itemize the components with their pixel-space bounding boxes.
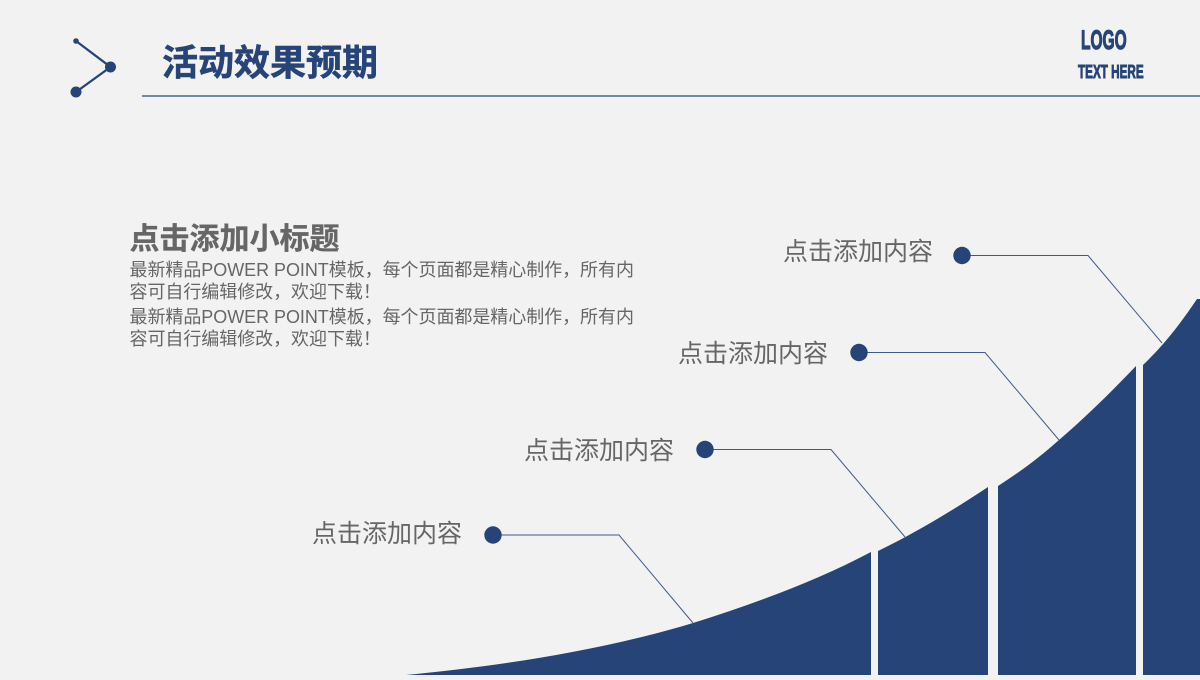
curve segment 4 [1143, 299, 1200, 675]
label 1: 点击添加内容 [312, 520, 462, 548]
subtitle: 点击添加小标题 [130, 223, 340, 256]
paragraph 2: 最新精品POWER POINT模板，每个页面都是精心制作，所有内 [130, 307, 634, 327]
header rule [142, 95, 1200, 97]
paragraph 2 [130, 307, 634, 349]
logo tagline: TEXT HERE [1078, 62, 1144, 82]
label 3: 点击添加内容 [678, 340, 828, 368]
connector 1 [484, 526, 693, 623]
connector 2 [696, 441, 905, 537]
paragraph 2: 容可自行编辑修改，欢迎下载！ [130, 329, 381, 349]
connector 3 [850, 344, 1059, 440]
logo [1078, 25, 1144, 82]
icon: node arrow [70, 38, 116, 98]
curve segment 2 [878, 487, 988, 675]
body text [130, 260, 634, 349]
label 4: 点击添加内容 [783, 238, 933, 266]
paragraph 1: 容可自行编辑修改，欢迎下载！ [130, 282, 381, 302]
logo word: LOGO [1081, 25, 1127, 55]
title: 活动效果预期 [162, 42, 378, 83]
connector 4 [953, 247, 1162, 343]
paragraph 1: 最新精品POWER POINT模板，每个页面都是精心制作，所有内 [130, 260, 634, 280]
curve segment 1 [406, 552, 871, 675]
paragraph 1 [130, 260, 634, 302]
label 2: 点击添加内容 [524, 437, 674, 465]
curve segment 3 [998, 366, 1136, 675]
